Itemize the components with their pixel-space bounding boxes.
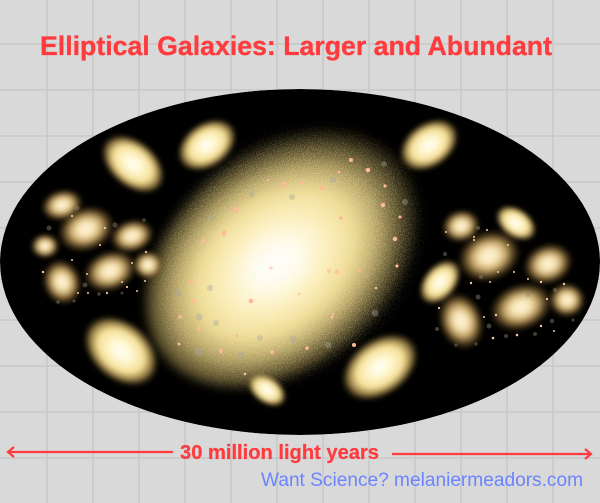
source credit: Want Science? melaniermeadors.com	[261, 470, 583, 491]
left cluster stars	[42, 215, 147, 294]
galaxy: upper right	[398, 118, 460, 172]
galaxy: bottom small	[246, 373, 288, 408]
scale arrow: right	[392, 449, 591, 459]
scale arrow: left	[8, 447, 173, 457]
central giant elliptical galaxy	[140, 122, 427, 395]
right galaxy cluster	[418, 204, 586, 350]
scale label: 30 million light years	[180, 441, 379, 464]
galaxy: lower left	[82, 314, 160, 388]
grey star clusters around central galaxy	[174, 161, 408, 358]
title: Elliptical Galaxies: Larger and Abundant	[40, 31, 552, 61]
left galaxy cluster	[30, 184, 164, 311]
galaxy: lower right	[341, 332, 419, 402]
panel: elliptical supercluster field	[0, 76, 600, 440]
galaxy: upper left	[100, 133, 166, 195]
pink star clusters around central galaxy	[178, 158, 402, 375]
galaxy: upper middle	[176, 118, 238, 172]
right cluster stars	[438, 229, 565, 339]
